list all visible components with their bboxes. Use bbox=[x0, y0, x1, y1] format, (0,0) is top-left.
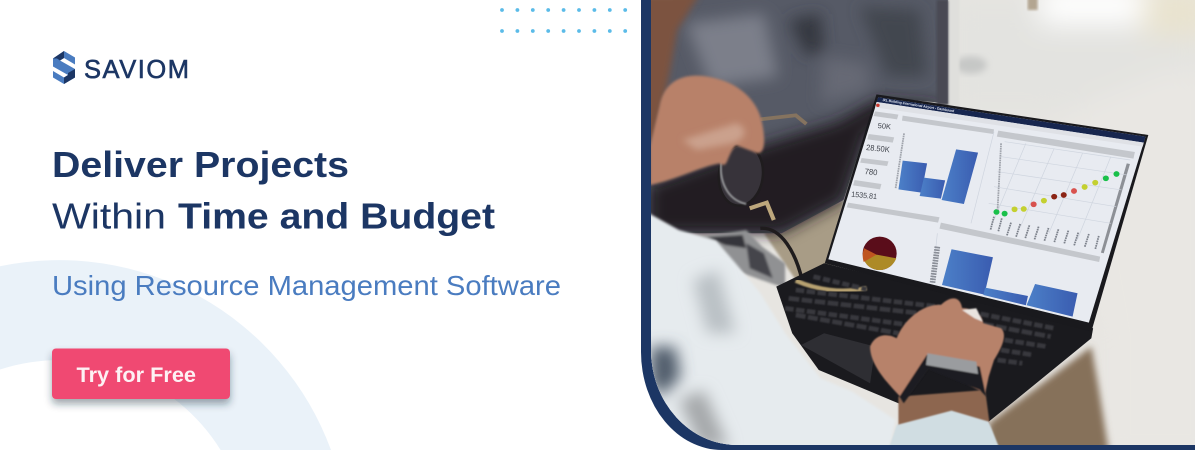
icon: Saviom hexagonal S bbox=[53, 51, 75, 84]
chart: project health grid bbox=[932, 132, 1130, 283]
laptop screen bbox=[825, 94, 1148, 332]
decorative dot grid bbox=[500, 8, 627, 33]
chart: scatter dots bbox=[993, 171, 1119, 216]
title bar text: IXL Building International Airport - Dashboard bbox=[882, 98, 955, 113]
chart: cost bars bbox=[898, 149, 978, 204]
KPI cards: 28.50K bbox=[866, 143, 891, 154]
shirt bbox=[649, 213, 1003, 450]
button: Try for Free: Try for Free bbox=[76, 364, 196, 387]
dark jacket bbox=[649, 0, 959, 233]
chart: task bars bbox=[942, 249, 1078, 317]
photo: person using laptop with dashboard bbox=[644, 0, 1195, 450]
photo background: bright window and table bbox=[1035, 0, 1195, 39]
photo frame bbox=[641, 0, 1195, 450]
man's face bbox=[651, 0, 698, 140]
forearm bbox=[898, 390, 990, 430]
background arc bbox=[0, 260, 331, 450]
title bar bbox=[876, 97, 1146, 143]
logo wordmark: SAVIOM bbox=[84, 56, 189, 84]
heading: Within bbox=[52, 196, 166, 236]
chart: pie bbox=[863, 237, 897, 270]
KPI cards bbox=[851, 111, 898, 201]
button: Try for Free bbox=[52, 348, 230, 399]
logo: Saviom bbox=[53, 51, 189, 84]
KPI cards: 50K bbox=[877, 121, 891, 131]
typing hand and watch bbox=[870, 298, 1004, 403]
panel headers bbox=[902, 116, 994, 134]
KPI cards: 1535.81 bbox=[851, 189, 878, 201]
hand holding glasses bbox=[650, 76, 764, 185]
KPI cards: 780 bbox=[864, 167, 879, 177]
trackpad bbox=[801, 333, 875, 383]
keyboard keys bbox=[785, 277, 1054, 363]
heading bbox=[52, 144, 495, 236]
heading: Deliver Projects bbox=[52, 144, 349, 185]
laptop base bbox=[776, 263, 1093, 422]
wooden table bbox=[764, 200, 1109, 450]
heading: Time and Budget bbox=[178, 196, 495, 236]
glasses bbox=[716, 115, 806, 280]
subheading: Using Resource Management Software bbox=[52, 270, 561, 301]
coffee glass bbox=[693, 230, 785, 288]
chart: scatter axis labels bbox=[896, 133, 1099, 249]
